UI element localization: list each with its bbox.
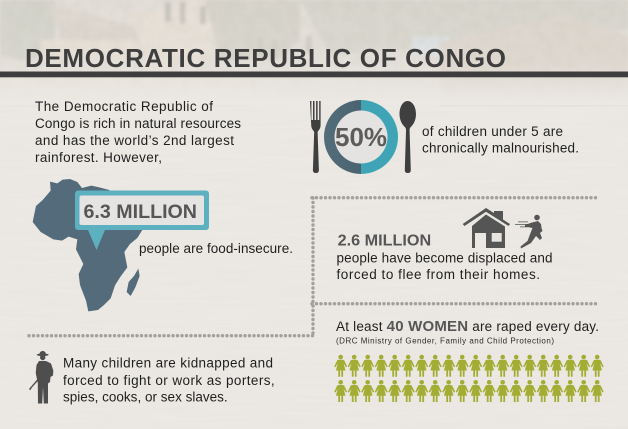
text: 40 women statistic: (DRC Ministry of Gender, Family and Child Protection)	[336, 336, 554, 346]
text: 2.6 million displaced: people have become displaced and	[336, 250, 552, 265]
text: malnourished statistic: of children under 5 are	[422, 124, 563, 139]
title: DEMOCRATIC REPUBLIC OF CONGO	[25, 43, 506, 73]
chart: 50 percent donut: 50%	[335, 122, 387, 152]
icon: spoon	[400, 101, 416, 173]
icon: running person	[515, 215, 542, 248]
pictogram: 40 women	[334, 355, 604, 402]
text: child soldiers: Many children are kidnapped and	[63, 356, 273, 371]
text: 2.6 million displaced: forced to flee from their homes.	[336, 267, 540, 282]
icon: fork	[310, 101, 321, 173]
icon: house	[463, 208, 510, 248]
text: people are food-insecure: people are food-insecure.	[139, 241, 293, 256]
text block: introduction: Congo is rich in natural resources	[35, 116, 241, 131]
text: malnourished statistic: chronically malnourished.	[422, 141, 579, 156]
text block: introduction: The Democratic Republic of	[35, 99, 213, 114]
icon: map of Africa with callout	[33, 179, 209, 311]
row of 20 women, top	[334, 355, 604, 377]
callout: 6.3 million: 6.3 MILLION	[84, 202, 197, 223]
text: 2.6 million displaced	[336, 233, 552, 282]
row of 20 women, bottom	[334, 380, 604, 402]
text: child soldiers: forced to fight or work as porters,	[63, 373, 275, 388]
icon: child soldier	[29, 351, 53, 404]
text: malnourished statistic	[422, 124, 579, 156]
text: 2.6 million displaced: 2.6 MILLION	[338, 233, 431, 250]
text: child soldiers: spies, cooks, or sex slaves.	[63, 390, 228, 405]
text block: introduction: rainforest. However,	[35, 150, 162, 165]
text: child soldiers	[63, 356, 275, 405]
text block: introduction	[35, 99, 241, 165]
callout: 6.3 million	[75, 190, 209, 250]
title rule	[0, 72, 628, 77]
text: 40 women statistic	[336, 318, 599, 346]
background photo: faded village street	[0, 0, 628, 105]
dotted dividers	[29, 198, 598, 336]
map of Africa	[33, 179, 143, 311]
chart: 50 percent donut	[324, 100, 398, 174]
text: 40 women statistic: At least 40 WOMEN are raped every day.	[336, 318, 599, 335]
text block: introduction: and has the world’s 2nd largest	[35, 133, 234, 148]
